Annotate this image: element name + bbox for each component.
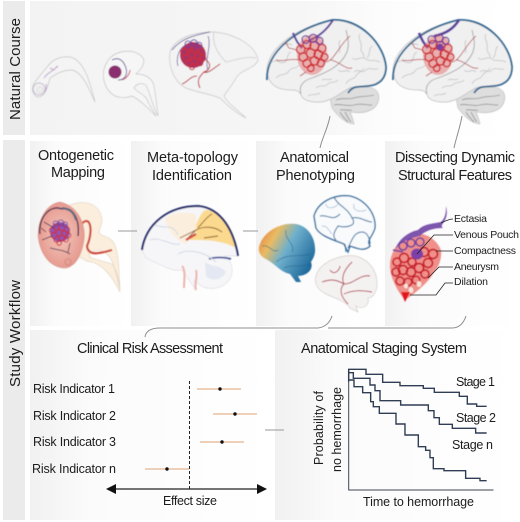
y axis label: no hemorrhage (330, 387, 344, 472)
sidebar: Natural Course (3, 1, 25, 135)
sidebar: Study Workflow (3, 140, 25, 520)
heading: Dissecting Dynamic Structural Features: Structural Features (398, 168, 512, 184)
axis label: Effect size (163, 494, 217, 508)
panel: anatomical staging system (275, 330, 520, 520)
sidebar label: Study Workflow: Study Workflow (7, 280, 24, 387)
illustration: arterial brain (315, 256, 377, 312)
panel: meta-topology identification (131, 141, 256, 326)
y axis label (312, 387, 344, 472)
heading: Anatomical Phenotyping: Phenotyping (276, 168, 355, 184)
connector: natural course to dissecting (454, 116, 462, 148)
heading: Dissecting Dynamic Structural Features (395, 150, 515, 184)
effect size axis arrow (106, 484, 267, 494)
heading: Ontogenetic Mapping (38, 148, 114, 181)
risk indicator labels: Risk Indicator n (32, 462, 116, 476)
arrow: ontogenetic from meta-topology (118, 230, 137, 232)
illustration: ontogenetic mapping embryo (38, 202, 120, 292)
survival chart (312, 369, 496, 509)
arrow: meta-topology from phenotyping (243, 230, 258, 232)
y axis label: Probability of (312, 390, 326, 465)
heading: Meta-topology Identification: Meta-topology (147, 150, 239, 166)
panel: ontogenetic mapping (30, 141, 131, 326)
panel: natural course (30, 1, 520, 135)
illustration: colored brain (259, 224, 315, 282)
heading: Meta-topology Identification: Identification (152, 168, 232, 184)
x axis label: Time to hemorrhage (363, 495, 474, 509)
illustration: adult brain with progressed AVM (393, 20, 512, 124)
sidebar label: Natural Course: Natural Course (7, 18, 24, 120)
feature labels: Aneurysm (454, 261, 499, 273)
heading: Ontogenetic Mapping: Mapping (51, 165, 105, 181)
feature labels: Venous Pouch (454, 229, 519, 241)
survival curves (349, 369, 487, 481)
feature labels: Dilation (454, 276, 488, 288)
heading: Ontogenetic Mapping: Ontogenetic (38, 148, 114, 164)
feature labels (454, 213, 519, 288)
illustration: fetal brain (170, 32, 258, 118)
stage labels: Stage n (452, 438, 493, 452)
stage labels: Stage 2 (456, 411, 496, 425)
connector: natural course to phenotyping (320, 116, 330, 148)
callout lines (410, 219, 453, 295)
illustration: venous brain (314, 196, 375, 252)
heading: Anatomical Phenotyping: Anatomical (280, 150, 349, 166)
effect estimates (145, 387, 257, 471)
heading: Meta-topology Identification (147, 150, 239, 184)
risk indicator labels (32, 382, 116, 476)
feature labels: Ectasia (454, 213, 487, 225)
panel: anatomical phenotyping (256, 141, 385, 326)
stage labels (452, 375, 496, 452)
heading: Anatomical Staging System: Anatomical Staging System (301, 341, 467, 357)
panel: dissecting dynamic structural features (385, 141, 520, 326)
forest plot (32, 381, 267, 508)
panel: clinical risk assessment (30, 330, 275, 520)
risk indicator labels: Risk Indicator 2 (33, 409, 116, 423)
connector: workflow to clinical panel (145, 316, 466, 337)
arrow: risk to staging (265, 429, 284, 431)
heading: Dissecting Dynamic Structural Features: Dissecting Dynamic (395, 150, 515, 166)
feature labels: Compactness (454, 245, 516, 257)
illustration: meta-topology brain (142, 206, 238, 290)
heading: Anatomical Phenotyping (276, 150, 355, 184)
illustration: adult brain with AVM (267, 20, 386, 124)
stage labels: Stage 1 (456, 375, 495, 389)
risk indicator labels: Risk Indicator 1 (33, 382, 115, 396)
risk indicator labels: Risk Indicator 3 (33, 435, 116, 449)
illustration: AVM nidus detail (390, 206, 447, 302)
illustration: embryo with nidus (103, 51, 158, 116)
heading: Clinical Risk Assessment: Clinical Risk Assessment (77, 341, 223, 357)
illustration: early embryo (33, 57, 95, 102)
